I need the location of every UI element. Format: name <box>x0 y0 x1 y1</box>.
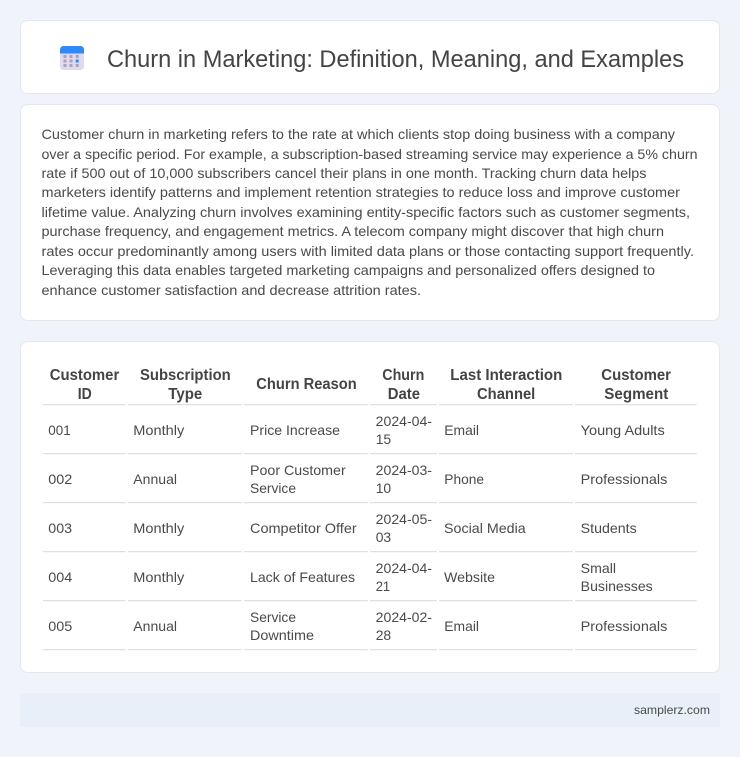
table row: customer 002: Professionals <box>581 471 667 487</box>
table row: customer 004: 21 <box>376 578 390 594</box>
table row: customer 001: 15 <box>376 431 391 447</box>
table header row: Churn <box>382 367 424 384</box>
text block: churn description <box>42 126 698 298</box>
table row: customer 003: Competitor Offer <box>250 520 357 536</box>
table row: customer 002: 10 <box>376 480 391 496</box>
table row: customer 003: 003 <box>48 520 72 536</box>
table row: customer 003: 2024-05- <box>376 511 432 527</box>
table row: customer 004: 2024-04- <box>376 560 432 576</box>
table row: customer 004: Website <box>444 569 495 585</box>
footer credit: samplerz.com <box>634 703 710 717</box>
text block: churn description: enhance customer satisfaction and decrease attrition rates. <box>42 282 421 298</box>
text block: churn description: Leveraging this data enables targeted marketing campaigns and personalized offers designed to <box>42 262 655 278</box>
table row: customer 003: 03 <box>376 529 391 545</box>
table header row: Subscription <box>140 367 231 384</box>
table row: customer 002: 002 <box>48 471 73 487</box>
table row: customer 003: Monthly <box>133 520 184 536</box>
table row: customer 005: 005 <box>48 618 73 634</box>
text block: churn description: over a specific period. For example, a subscription-based streaming service may experience a 5% churn <box>42 146 698 162</box>
text block: churn description: Customer churn in marketing refers to the rate at which clients stop doing business with a company <box>42 126 675 142</box>
table row: customer 002: Poor Customer <box>250 462 346 478</box>
text block: churn description: lifetime value. Analyzing churn involves examining entity-specific factors such as customer segments, <box>42 204 690 220</box>
panel: title header <box>20 20 720 94</box>
table row: customer 001: Monthly <box>133 422 184 438</box>
table row: customer 004: Small <box>581 560 616 576</box>
table row: customer 003: Social Media <box>444 520 526 536</box>
icon: calendar <box>60 46 84 70</box>
table row: customer 002: Service <box>250 480 296 496</box>
table header row: Date <box>388 386 420 403</box>
panel: churn table <box>20 342 720 672</box>
table row: customer 004: Businesses <box>581 578 653 594</box>
table header row: Churn Reason <box>256 376 357 393</box>
table header row: Channel <box>477 386 535 403</box>
text block: churn description: purchase frequency, and engagement metrics. A telecom company might discover that high churn <box>42 223 664 239</box>
table row: customer 001: Email <box>444 422 479 438</box>
table row: customer 003 <box>48 511 637 545</box>
table row: customer 004: 004 <box>48 569 73 585</box>
table header row: Customer <box>601 367 671 384</box>
footer bar <box>20 693 720 727</box>
text block: churn description: rate if 500 out of 10,000 subscribers cancel their plans in one month. Tracking churn data helps <box>42 165 646 181</box>
text block: churn description: marketers identify patterns and implement retention strategies to reduce loss and improve customer <box>42 184 680 200</box>
table row: customer 004: Monthly <box>133 569 184 585</box>
table header row: Type <box>168 386 202 403</box>
text block: churn description: rates occur predominantly among users with limited data plans or those contacting support frequently. <box>42 243 694 259</box>
title: Churn in Marketing: Definition, Meaning, and Examples <box>107 46 684 73</box>
table row: customer 005: 2024-02- <box>376 609 432 625</box>
table row: customer 005: Downtime <box>250 627 314 643</box>
table row: customer 005: 28 <box>376 627 391 643</box>
table row: customer 004: Lack of Features <box>250 569 355 585</box>
table row: customer 002: Phone <box>444 471 484 487</box>
table header row: Segment <box>604 386 669 403</box>
table row: customer 005: Annual <box>133 618 177 634</box>
table header row: Last Interaction <box>450 367 562 384</box>
table row: customer 005: Professionals <box>581 618 667 634</box>
table row: customer 005: Service <box>250 609 296 625</box>
table row: customer 001: Price Increase <box>250 422 340 438</box>
panel: description <box>20 104 720 320</box>
table header row: ID <box>78 386 92 403</box>
table row: customer 004 <box>48 560 653 594</box>
table row: customer 001: Young Adults <box>581 422 665 438</box>
table row: customer 001 <box>48 413 665 447</box>
table row: customer 001: 2024-04- <box>376 413 432 429</box>
table row: customer 005 <box>48 609 667 643</box>
table row: customer 003: Students <box>581 520 637 536</box>
table row: customer 002: 2024-03- <box>376 462 432 478</box>
table header row: Customer <box>50 367 119 384</box>
table row: customer 005: Email <box>444 618 479 634</box>
table header row <box>50 367 671 403</box>
table row: customer 002 <box>48 462 667 496</box>
table row: customer 002: Annual <box>133 471 177 487</box>
table row: customer 001: 001 <box>48 422 71 438</box>
